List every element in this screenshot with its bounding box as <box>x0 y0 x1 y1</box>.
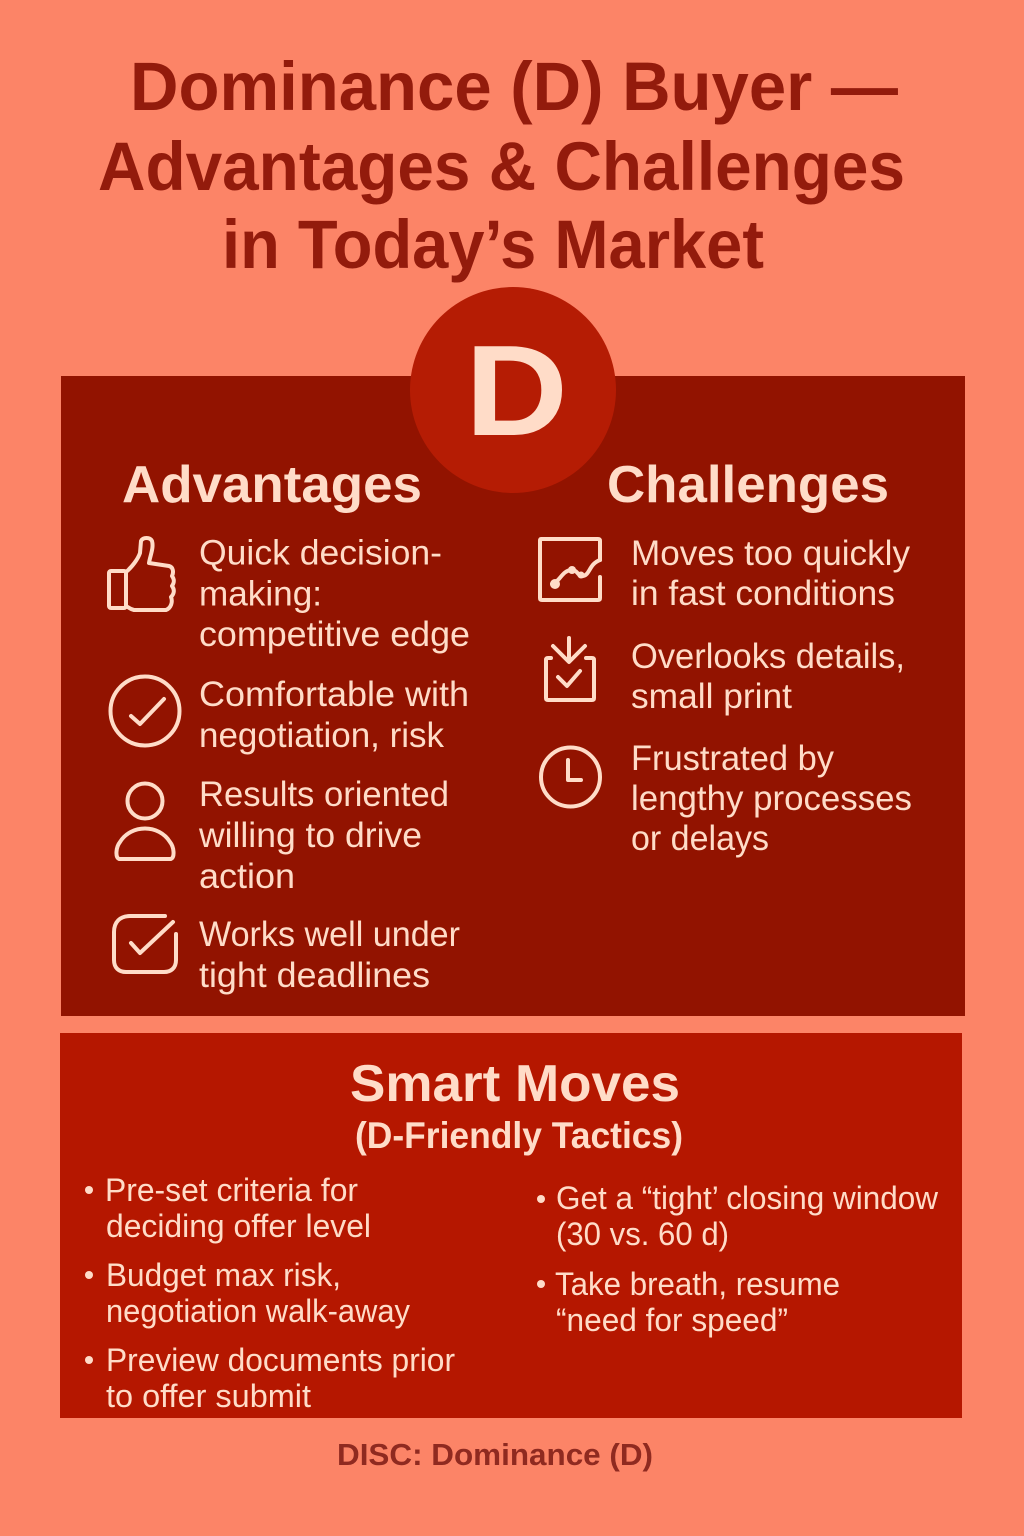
bullet: preview documents: Preview documents prior <box>106 1342 455 1378</box>
subheading: d-friendly tactics: (D-Friendly Tactics) <box>355 1115 683 1156</box>
bullet: pre-set criteria: deciding offer level <box>106 1208 371 1244</box>
bullet: tight closing window: Get a “tight’ closing window <box>556 1180 939 1216</box>
text: results oriented: action <box>199 857 295 896</box>
text: comfortable with negotiation <box>199 675 469 755</box>
badge: letter D: D <box>465 319 568 463</box>
icon: person <box>116 784 174 859</box>
icon: thumbs up <box>109 538 174 610</box>
bullet: take breath: “need for speed” <box>556 1302 788 1338</box>
bullet: take breath <box>537 1266 840 1338</box>
icon: clock <box>541 748 600 806</box>
text: comfortable with negotiation: Comfortable with <box>199 675 469 714</box>
text: works well under deadlines: Works well under <box>199 915 460 954</box>
bullet: pre-set criteria <box>85 1172 371 1244</box>
text: moves too quickly <box>631 534 911 613</box>
text: frustrated by processes <box>631 739 912 858</box>
text: overlooks details: Overlooks details, <box>631 637 905 676</box>
text: works well under deadlines <box>199 915 460 995</box>
bullet: preview documents: to offer submit <box>106 1378 311 1414</box>
text: quick decision-making: Quick decision- <box>199 534 442 572</box>
text: works well under deadlines: tight deadlines <box>199 956 430 995</box>
bullet: preview documents <box>85 1342 455 1414</box>
panel: smart moves <box>60 1033 962 1418</box>
icon: check circle <box>110 676 180 746</box>
text: moves too quickly: in fast conditions <box>631 574 895 613</box>
title: Dominance (D) Buyer — <box>130 48 898 125</box>
title <box>98 48 905 283</box>
title: Advantages & Challenges <box>98 128 905 205</box>
text: quick decision-making <box>199 534 470 654</box>
bullet: take breath: Take breath, resume <box>555 1266 840 1302</box>
badge: letter D <box>410 287 616 493</box>
heading: challenges: Challenges <box>607 456 889 514</box>
title: in Today’s Market <box>222 206 764 283</box>
text: moves too quickly: Moves too quickly <box>631 534 911 573</box>
bullet: budget max risk: negotiation walk-away <box>106 1293 410 1329</box>
text: overlooks details: small print <box>631 677 792 716</box>
icon: checked box <box>114 916 176 972</box>
text: results oriented: willing to drive <box>198 816 422 855</box>
bullet: budget max risk <box>85 1257 410 1329</box>
heading: smart moves: Smart Moves <box>350 1055 680 1113</box>
text: quick decision-making: competitive edge <box>199 615 470 654</box>
text: frustrated by processes: or delays <box>631 819 769 858</box>
text: frustrated by processes: lengthy processes <box>631 779 912 818</box>
text: overlooks details <box>631 637 905 716</box>
bullet: pre-set criteria: Pre-set criteria for <box>105 1172 358 1208</box>
text: results oriented <box>198 775 449 896</box>
icon: chart <box>540 539 600 600</box>
bullet: budget max risk: Budget max risk, <box>106 1257 341 1293</box>
footer label: DISC: Dominance (D) <box>337 1437 653 1472</box>
bullet: tight closing window <box>537 1180 939 1252</box>
text: frustrated by processes: Frustrated by <box>631 739 834 778</box>
bullet: tight closing window: (30 vs. 60 d) <box>556 1216 729 1252</box>
icon: inbox check <box>546 638 594 700</box>
heading: advantages: Advantages <box>122 456 422 514</box>
text: comfortable with negotiation: negotiation, risk <box>199 716 444 755</box>
text: results oriented: Results oriented <box>199 775 449 814</box>
text: quick decision-making: making: <box>199 574 322 614</box>
panel: advantages and challenges <box>61 287 965 1016</box>
